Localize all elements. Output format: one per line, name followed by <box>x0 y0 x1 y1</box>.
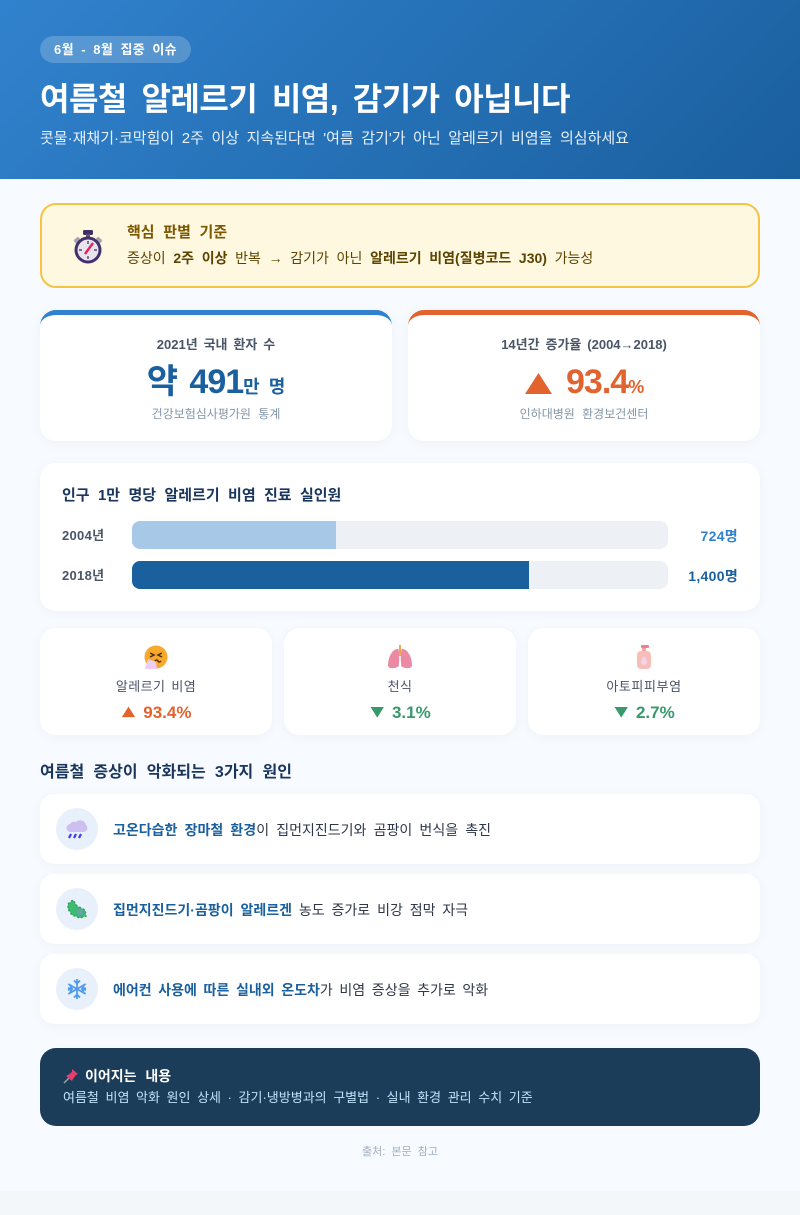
year label: 2018년 <box>62 568 104 583</box>
icon: pushpin <box>64 1069 78 1084</box>
callout: key criterion <box>40 203 760 288</box>
cause text: 에어컨 사용에 따른 실내외 온도차가 비염 증상을 추가로 악화 <box>113 982 488 998</box>
icon: lungs <box>388 645 412 668</box>
icon: rain cloud <box>56 808 98 850</box>
chart title: 인구 1만 명당 알레르기 비염 진료 실인원 <box>62 487 341 504</box>
stat label: 14년간 증가율 (2004→2018) <box>501 337 667 352</box>
stat source: 건강보험심사평가원 통계 <box>152 407 280 421</box>
section heading: 여름철 증상이 악화되는 3가지 원인 <box>40 764 292 781</box>
callout text: 증상이 2주 이상 반복 → 감기가 아닌 알레르기 비염(질병코드 J30) 가능성 <box>127 250 593 266</box>
source note: 출처: 본문 참고 <box>362 1146 438 1158</box>
panel text: 여름철 비염 악화 원인 상세 · 감기·냉방병과의 구별법 · 실내 환경 관리 수치 기준 <box>63 1090 533 1105</box>
stat source: 인하대병원 환경보건센터 <box>520 407 648 421</box>
label: 천식 <box>388 679 412 694</box>
icon: snowflake <box>56 968 98 1010</box>
title: 여름철 알레르기 비염, 감기가 아닙니다 <box>40 81 570 117</box>
panel: atopic dermatitis <box>528 628 760 735</box>
header banner <box>0 0 800 179</box>
cause card 2 <box>40 874 760 944</box>
cause text: 고온다습한 장마철 환경이 집먼지진드기와 곰팡이 번식을 촉진 <box>113 822 491 838</box>
year label: 2004년 <box>62 528 104 543</box>
bar row: 2004 <box>62 521 738 549</box>
icon: sneezing face <box>144 646 168 669</box>
subtitle: 콧물·재채기·코막힘이 2주 이상 지속된다면 '여름 감기'가 아닌 알레르기 비염을 의심하세요 <box>40 130 629 147</box>
stat value: 93.4% <box>566 363 644 401</box>
cause card 3 <box>40 954 760 1024</box>
value: 724명 <box>701 528 738 544</box>
panel: bar chart <box>40 463 760 611</box>
panel: continued content <box>40 1048 760 1126</box>
badge <box>40 36 191 63</box>
icon: stopwatch <box>74 230 102 264</box>
panel heading: 이어지는 내용 <box>85 1068 171 1084</box>
stat card: growth <box>408 310 760 441</box>
callout heading: 핵심 판별 기준 <box>127 224 227 241</box>
bar <box>132 521 668 549</box>
value: ▼ 3.1% <box>369 703 431 722</box>
badge: 6월 - 8월 집중 이슈 <box>54 42 177 57</box>
bar <box>132 561 668 589</box>
panel: asthma <box>284 628 516 735</box>
value: ▼ 2.7% <box>613 703 675 722</box>
value: ▲ 93.4% <box>121 703 191 722</box>
panel: allergic rhinitis <box>40 628 272 735</box>
label: 알레르기 비염 <box>116 679 196 694</box>
stat label: 2021년 국내 환자 수 <box>157 337 275 352</box>
icon: microbe <box>56 888 98 930</box>
icon: up triangle <box>525 373 552 394</box>
stat card: patients <box>40 310 392 441</box>
label: 아토피피부염 <box>606 679 682 694</box>
icon: lotion bottle <box>637 645 651 669</box>
cause card 1 <box>40 794 760 864</box>
bar row: 2018 <box>62 561 738 589</box>
stat value: 약 491만 명 <box>147 363 285 401</box>
cause text: 집먼지진드기·곰팡이 알레르겐 농도 증가로 비강 점막 자극 <box>113 902 468 918</box>
value: 1,400명 <box>688 568 738 584</box>
